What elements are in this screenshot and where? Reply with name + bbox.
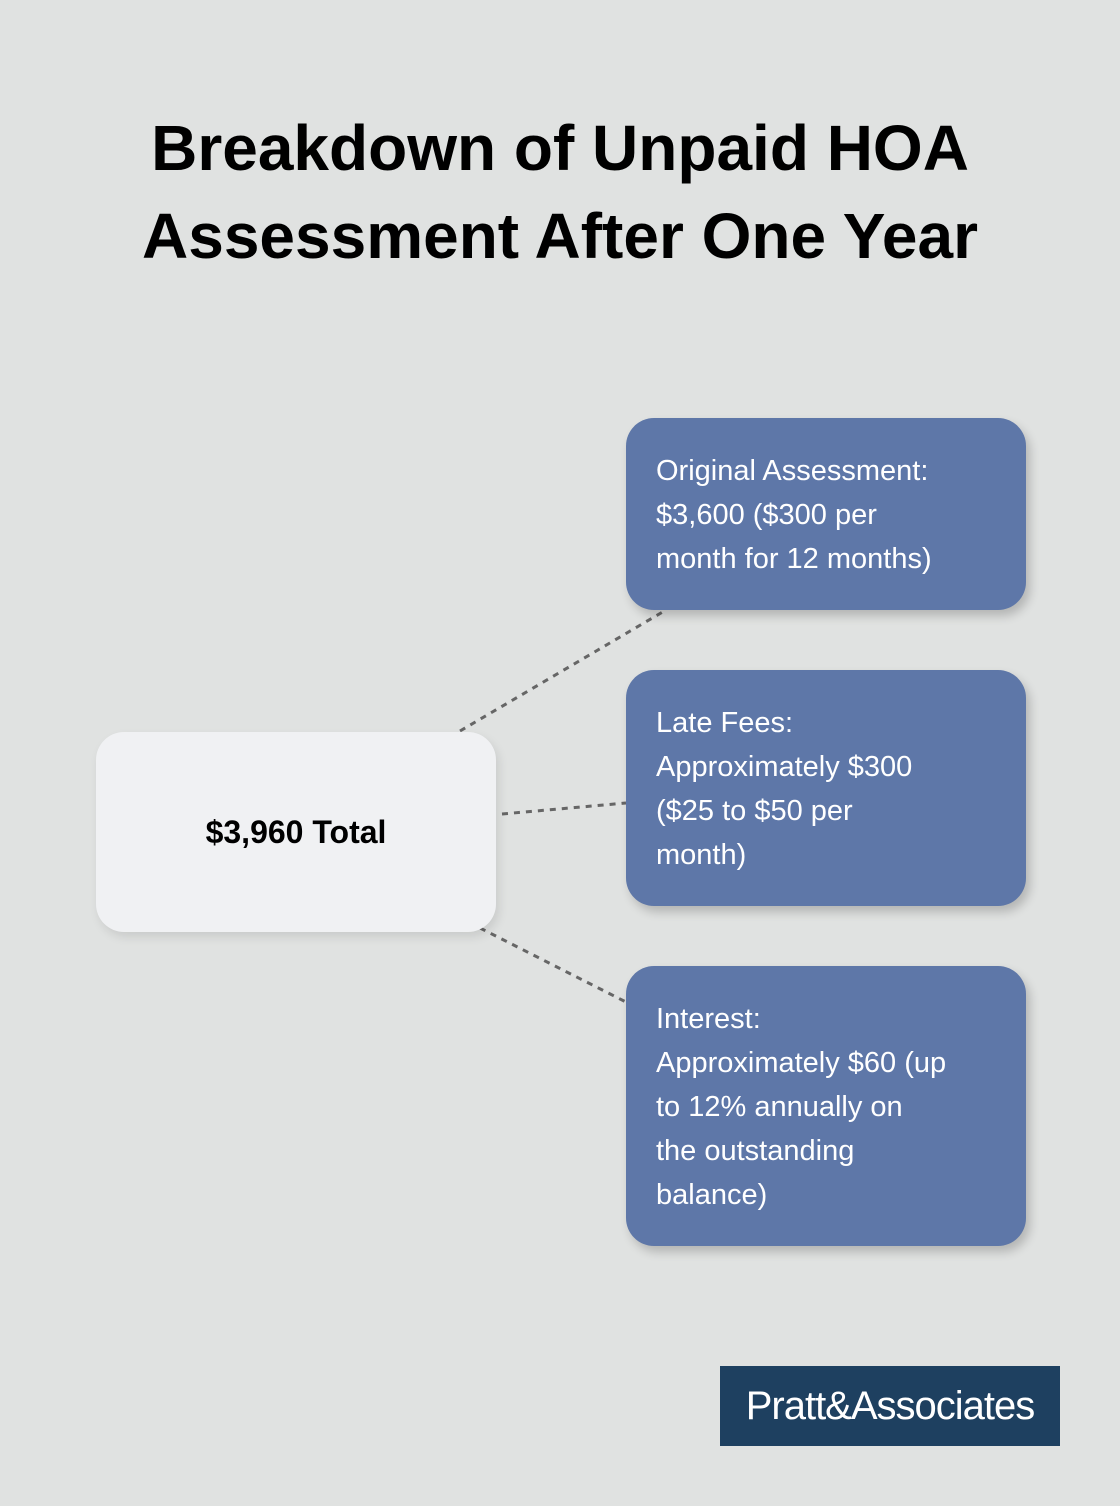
title: Assessment After One Year [142,200,978,272]
box: interest: Approximately $60 (up [656,1047,946,1079]
box: late fees: month) [656,839,746,871]
box: late fees: Late Fees: [656,707,793,739]
box: original assessment: Original Assessment: [656,455,928,487]
box: late fees: ($25 to $50 per [656,795,853,827]
logo: Pratt&Associates [746,1384,1034,1428]
box: late fees [626,670,1026,906]
logo [720,1366,1060,1446]
box: original assessment: month for 12 months) [656,543,932,575]
total box [96,732,496,932]
box: interest: to 12% annually on [656,1091,903,1123]
title: Breakdown of Unpaid HOA [151,112,969,184]
box: interest: Interest: [656,1003,761,1035]
title [142,112,978,272]
box: interest: balance) [656,1179,767,1211]
box: original assessment: $3,600 ($300 per [656,499,877,531]
box: original assessment [626,418,1026,610]
box: interest: the outstanding [656,1135,854,1167]
box: interest [626,966,1026,1246]
box: late fees: Approximately $300 [656,751,912,783]
total box: $3,960 Total [206,814,386,850]
